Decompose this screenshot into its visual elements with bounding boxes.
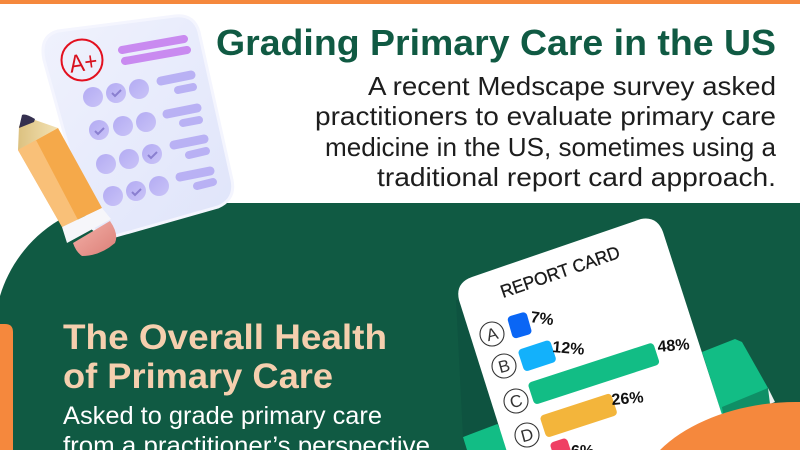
section body text: Asked to grade primary care	[63, 402, 382, 430]
card heading: REPORT CARD	[498, 242, 622, 302]
grade B row	[492, 339, 585, 378]
folder paper sliver	[768, 388, 775, 404]
grade C row: C	[508, 391, 525, 412]
intro text: medicine in the US, sometimes using a	[325, 132, 777, 162]
A+ grade stamp	[62, 40, 102, 80]
folder right flap	[702, 339, 768, 415]
intro text	[315, 71, 777, 192]
heading lines	[122, 39, 187, 61]
orange left tab	[0, 324, 13, 450]
card sheet	[458, 219, 735, 450]
intro text: practitioners to evaluate primary care	[315, 101, 776, 131]
check marks	[95, 90, 157, 195]
answer lines	[161, 75, 213, 186]
pencil ferrule	[62, 208, 111, 243]
top orange bar	[0, 0, 800, 4]
title: Grading Primary Care in the US	[216, 22, 776, 63]
grade A row	[480, 309, 555, 346]
section heading: of Primary Care	[63, 357, 333, 396]
grade F row	[549, 438, 594, 450]
grade B row: 12%	[552, 339, 585, 359]
grade D row: D	[519, 425, 536, 446]
section heading: The Overall Health	[63, 318, 387, 357]
folder right shadow	[722, 388, 774, 420]
report card	[458, 219, 735, 450]
pencil lead	[19, 114, 35, 128]
pencil wood tip	[18, 120, 58, 150]
grade C row: 48%	[657, 336, 690, 356]
grade A row: 7%	[529, 309, 555, 329]
grade B row: B	[496, 356, 512, 377]
grade D row: 26%	[611, 389, 644, 409]
section body text	[63, 402, 430, 450]
green background panel	[0, 203, 800, 450]
pencil body	[18, 128, 102, 227]
icon: graded test paper	[43, 16, 233, 239]
icon: pencil	[18, 114, 116, 256]
A+ grade stamp: A+	[68, 47, 99, 79]
answer bubbles	[83, 79, 169, 206]
section heading	[63, 318, 387, 396]
card shadow	[456, 300, 500, 437]
grade C row	[504, 336, 690, 413]
intro text: traditional report card approach.	[377, 162, 776, 192]
folder left flap	[463, 423, 510, 450]
intro text: A recent Medscape survey asked	[368, 71, 776, 101]
illustration: green folder	[463, 339, 775, 450]
grade D row	[515, 389, 644, 447]
paper sheet	[43, 16, 233, 239]
grade A row: A	[484, 324, 501, 345]
pencil light facet	[18, 140, 78, 227]
orange circle	[660, 402, 800, 450]
pencil eraser	[73, 221, 116, 256]
